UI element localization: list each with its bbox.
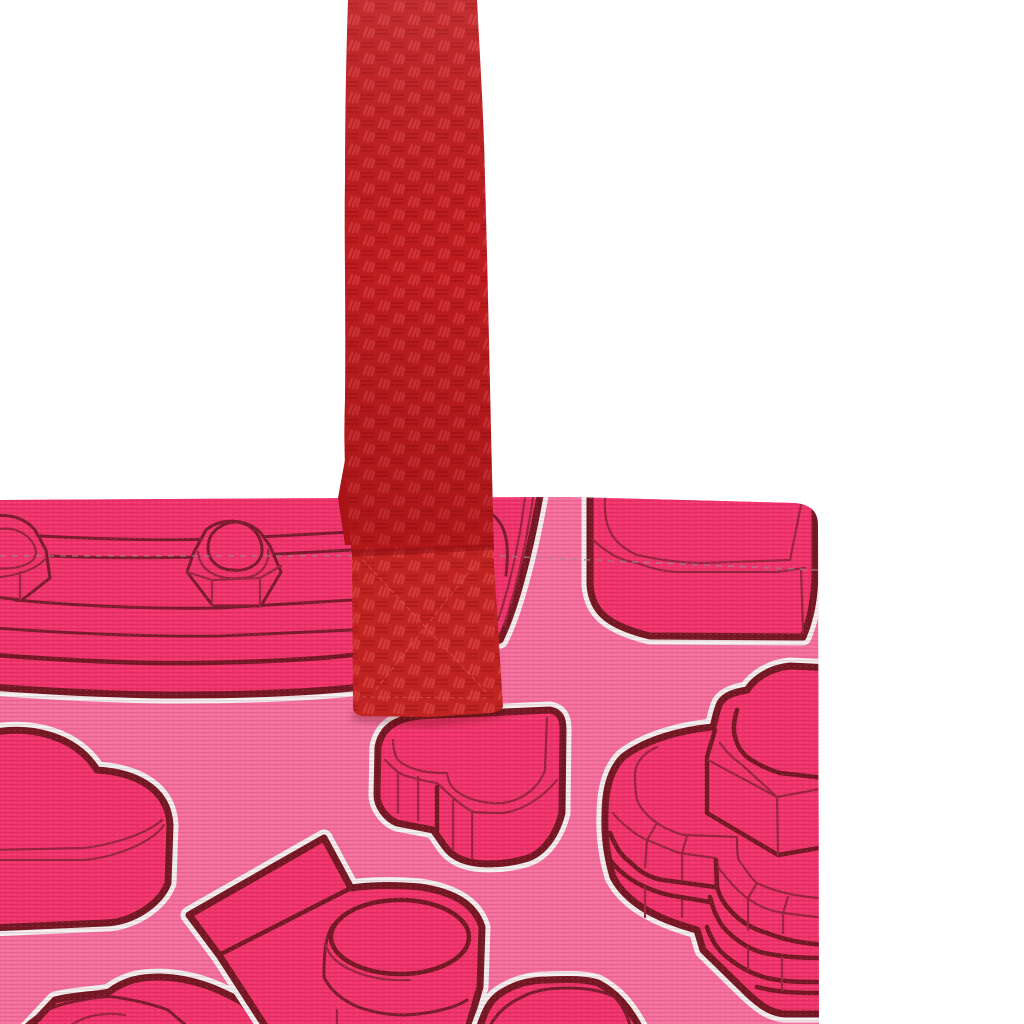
printed pattern on bag — [0, 490, 830, 1024]
fabric texture — [0, 495, 820, 1024]
cylinder outer wall — [324, 925, 467, 1015]
strap: X stitching — [362, 560, 487, 698]
icon: hex stud centre — [187, 521, 281, 606]
strap: stitched lower loop — [352, 547, 503, 717]
shape: bottom left block — [25, 977, 269, 1024]
shape: heart block left — [0, 730, 170, 928]
shape: stacked hearts right — [605, 666, 830, 1014]
red strap — [338, 0, 503, 717]
soft shadow below strap — [353, 708, 503, 726]
shape: bottom cylinder — [478, 979, 642, 1024]
icon: hex stud left — [0, 516, 50, 600]
cylinder top face — [331, 900, 469, 974]
strap: upper band — [344, 0, 494, 556]
icon: stud behind strap — [492, 514, 507, 575]
shape: large curved band with hex studs — [0, 490, 541, 695]
stitch line along hem — [0, 556, 818, 570]
shape: heart block centre — [377, 710, 563, 864]
strap: folded back flap — [338, 460, 352, 545]
icon: top hex block — [707, 672, 825, 855]
strap: upper shading — [344, 0, 494, 556]
strap: fold shadow — [352, 544, 494, 557]
shape: rounded box top right — [590, 490, 815, 637]
tote bag fabric panel — [0, 497, 819, 1024]
shape: hex tube and cylinder bottom — [189, 838, 482, 1024]
